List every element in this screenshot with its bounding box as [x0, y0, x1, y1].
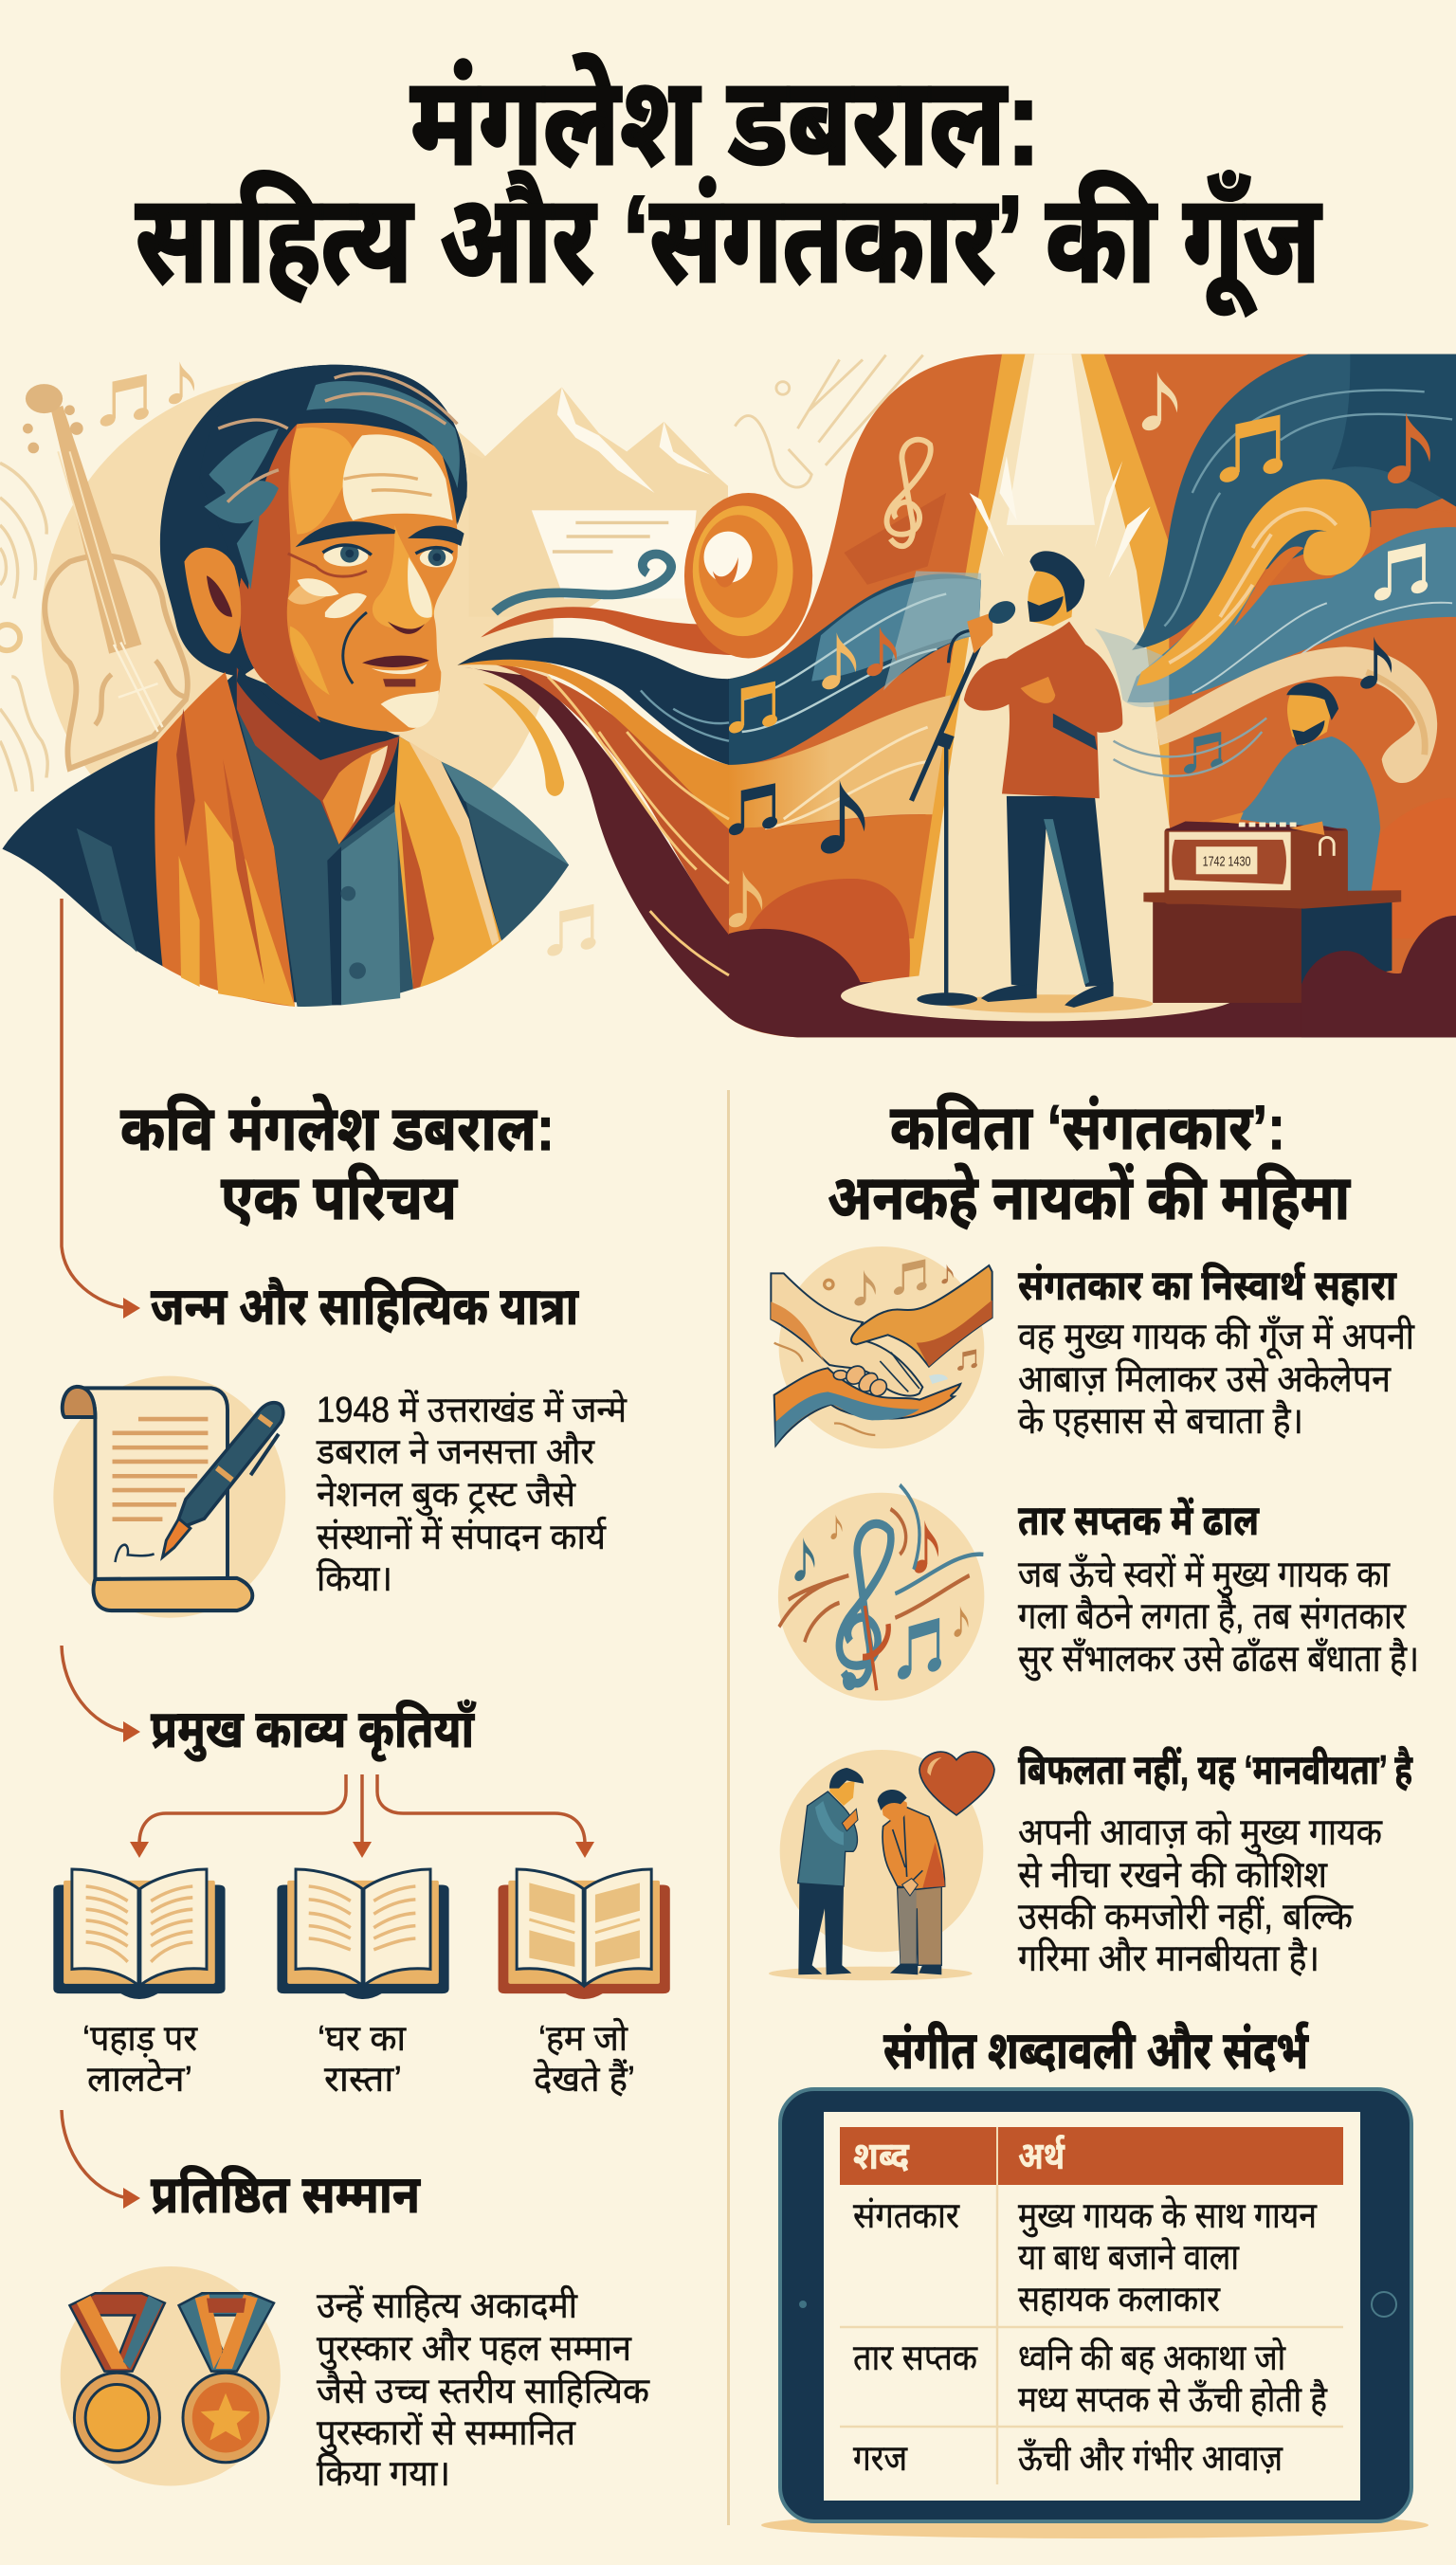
neck: [237, 665, 400, 845]
text: birth and journey: संस्थानों में संपादन कार्य: [317, 1516, 607, 1557]
table rows: या बाध बजाने वाला: [1018, 2236, 1240, 2278]
icon: scroll and pen: [53, 1376, 285, 1618]
harmonium player: 1742 1430: [1203, 855, 1251, 870]
shoulders: [2, 672, 569, 1004]
title: मंगलेश डबराल:: [410, 52, 1041, 191]
card 2 text: तार सप्तक में ढाल: [1018, 1497, 1260, 1544]
card 3 text: गरिमा और मानबीयता है।: [1018, 1937, 1320, 1979]
book captions: ‘हम जो: [538, 2017, 628, 2059]
heading: introduction: कवि मंगलेश डबराल:: [120, 1093, 555, 1163]
icon: supporting hands: [771, 1246, 992, 1448]
hair front and highlights: [200, 365, 467, 590]
table header: शब्द: [853, 2136, 909, 2177]
table rows: मध्य सप्तक से ऊँची होती है: [1018, 2378, 1328, 2420]
right column: the poem: [761, 1092, 1429, 2538]
text: honours: जैसे उच्च स्तरीय साहित्यिक: [317, 2370, 650, 2411]
singer at microphone: [911, 551, 1122, 1008]
arrow: to honours: [62, 2110, 140, 2209]
table header: [840, 2127, 1343, 2185]
text: honours: पुरस्कार और पहल सम्मान: [317, 2327, 632, 2370]
face: [239, 423, 462, 732]
card 3 text: से नीचा रखने की कोशिश: [1018, 1854, 1328, 1896]
spotlight: [898, 355, 1192, 985]
heading: poem: अनकहे नायकों की महिमा: [828, 1162, 1351, 1232]
heading: introduction: एक परिचय: [221, 1162, 458, 1232]
table rows: संगतकार: [853, 2196, 960, 2236]
clef and notes on orange: [887, 372, 1430, 776]
card 1 text: [1018, 1262, 1415, 1442]
card 1 text: आबाज़ मिलाकर उसे अकेलेपन: [1018, 1358, 1392, 1400]
ear: [184, 548, 241, 654]
text: birth and journey: नेशनल बुक ट्रस्ट जैसे: [317, 1473, 576, 1516]
table rows: सहायक कलाकार: [1018, 2280, 1221, 2319]
book: pahad par lalten: [53, 1869, 226, 1999]
book captions: रास्ता’: [324, 2060, 402, 2100]
panel background: stage and waves: [728, 355, 1456, 1037]
table header: अर्थ: [1018, 2135, 1065, 2177]
hero illustration: [0, 355, 1456, 1037]
subheading: honours: प्रतिष्ठित सम्मान: [151, 2165, 421, 2224]
book captions: ‘पहाड़ पर: [82, 2019, 198, 2059]
upper right wave: [1095, 355, 1456, 938]
lower left waves: [726, 571, 981, 985]
card 1 text: संगतकार का निस्वार्थ सहारा: [1018, 1262, 1397, 1309]
text: birth and journey: किया।: [317, 1557, 392, 1599]
table rows: [840, 2185, 1343, 2484]
icon: two medals: [61, 2266, 281, 2485]
saxophone and staff sketch: [735, 355, 923, 487]
floor and stage: [728, 929, 1456, 1037]
portrait of Mangalesh Dabral: [2, 365, 569, 1007]
arrows: branching to three books: [130, 1774, 594, 1858]
column divider: [727, 1090, 730, 2525]
title: [136, 52, 1322, 316]
left column: poet introduction: [53, 899, 670, 2494]
coat highlights: [77, 762, 569, 953]
card 1 text: के एहसास से बचाता है।: [1018, 1400, 1303, 1442]
sound waves from poet's mouth: [457, 493, 812, 1017]
heading: glossary: संगीत शब्दावली और संदर्भ: [883, 2021, 1309, 2080]
tablet with glossary table: [761, 2089, 1429, 2538]
background decorations: violin and notes: [0, 361, 554, 877]
text: honours: उन्हें साहित्य अकादमी: [317, 2284, 578, 2326]
arrow: to major works: [62, 1646, 140, 1742]
card 2 text: गला बैठने लगता है, तब संगतकार: [1018, 1595, 1407, 1637]
heading: introduction: [120, 1093, 555, 1232]
book captions: [82, 2017, 635, 2100]
subheading: birth and journey: जन्म और साहित्यिक यात्रा: [151, 1277, 579, 1336]
card 2 text: जब ऊँचे स्वरों में मुख्य गायक का: [1018, 1554, 1391, 1596]
shirt: [237, 709, 413, 1007]
text: birth and journey: डबराल ने जनसत्ता और: [316, 1430, 595, 1472]
swirling music notes group: [726, 355, 1456, 1037]
hair back: [160, 365, 467, 677]
book: ghar ka rasta: [277, 1869, 449, 1999]
icon: two people and heart: [769, 1750, 994, 1980]
card 3 text: अपनी आवाज़ को मुख्य गायक: [1018, 1811, 1383, 1854]
card 3 text: [1018, 1745, 1413, 1979]
heading: poem: कविता ‘संगतकार’:: [890, 1092, 1285, 1162]
subheading: major works: प्रमुख काव्य कृतियाँ: [151, 1700, 476, 1762]
heading: poem: [828, 1092, 1351, 1232]
book captions: देखते हैं’: [534, 2058, 635, 2100]
text: honours: पुरस्कारों से सम्मानित: [317, 2411, 576, 2454]
text: honours: [317, 2284, 650, 2494]
harmonium player: [1143, 682, 1456, 1037]
text: birth and journey: [316, 1389, 628, 1599]
text: honours: किया गया।: [317, 2452, 450, 2494]
card 3 text: उसकी कमजोरी नहीं, बल्कि: [1018, 1896, 1354, 1937]
arrow: to birth section: [62, 899, 140, 1319]
table rows: मुख्य गायक के साथ गायन: [1018, 2194, 1318, 2237]
text: birth and journey: 1948 में उत्तराखंड में जन्मे: [317, 1389, 628, 1430]
table rows: गरज: [853, 2439, 908, 2479]
icon: treble clef and notes: [778, 1484, 984, 1701]
book: hum jo dekhte hain: [499, 1869, 670, 1999]
card 1 text: वह मुख्य गायक की गूँज में अपनी: [1018, 1316, 1415, 1359]
table rows: तार सप्तक: [853, 2338, 978, 2378]
table rows: ध्वनि की बह अकाथा जो: [1018, 2337, 1286, 2378]
book captions: ‘घर का: [318, 2019, 407, 2059]
scarf: [155, 672, 501, 1007]
table rows: ऊँची और गंभीर आवाज़: [1018, 2437, 1283, 2479]
mountains and lake: [469, 387, 728, 958]
book captions: लालटेन’: [87, 2058, 192, 2100]
card 2 text: [1018, 1497, 1419, 1681]
